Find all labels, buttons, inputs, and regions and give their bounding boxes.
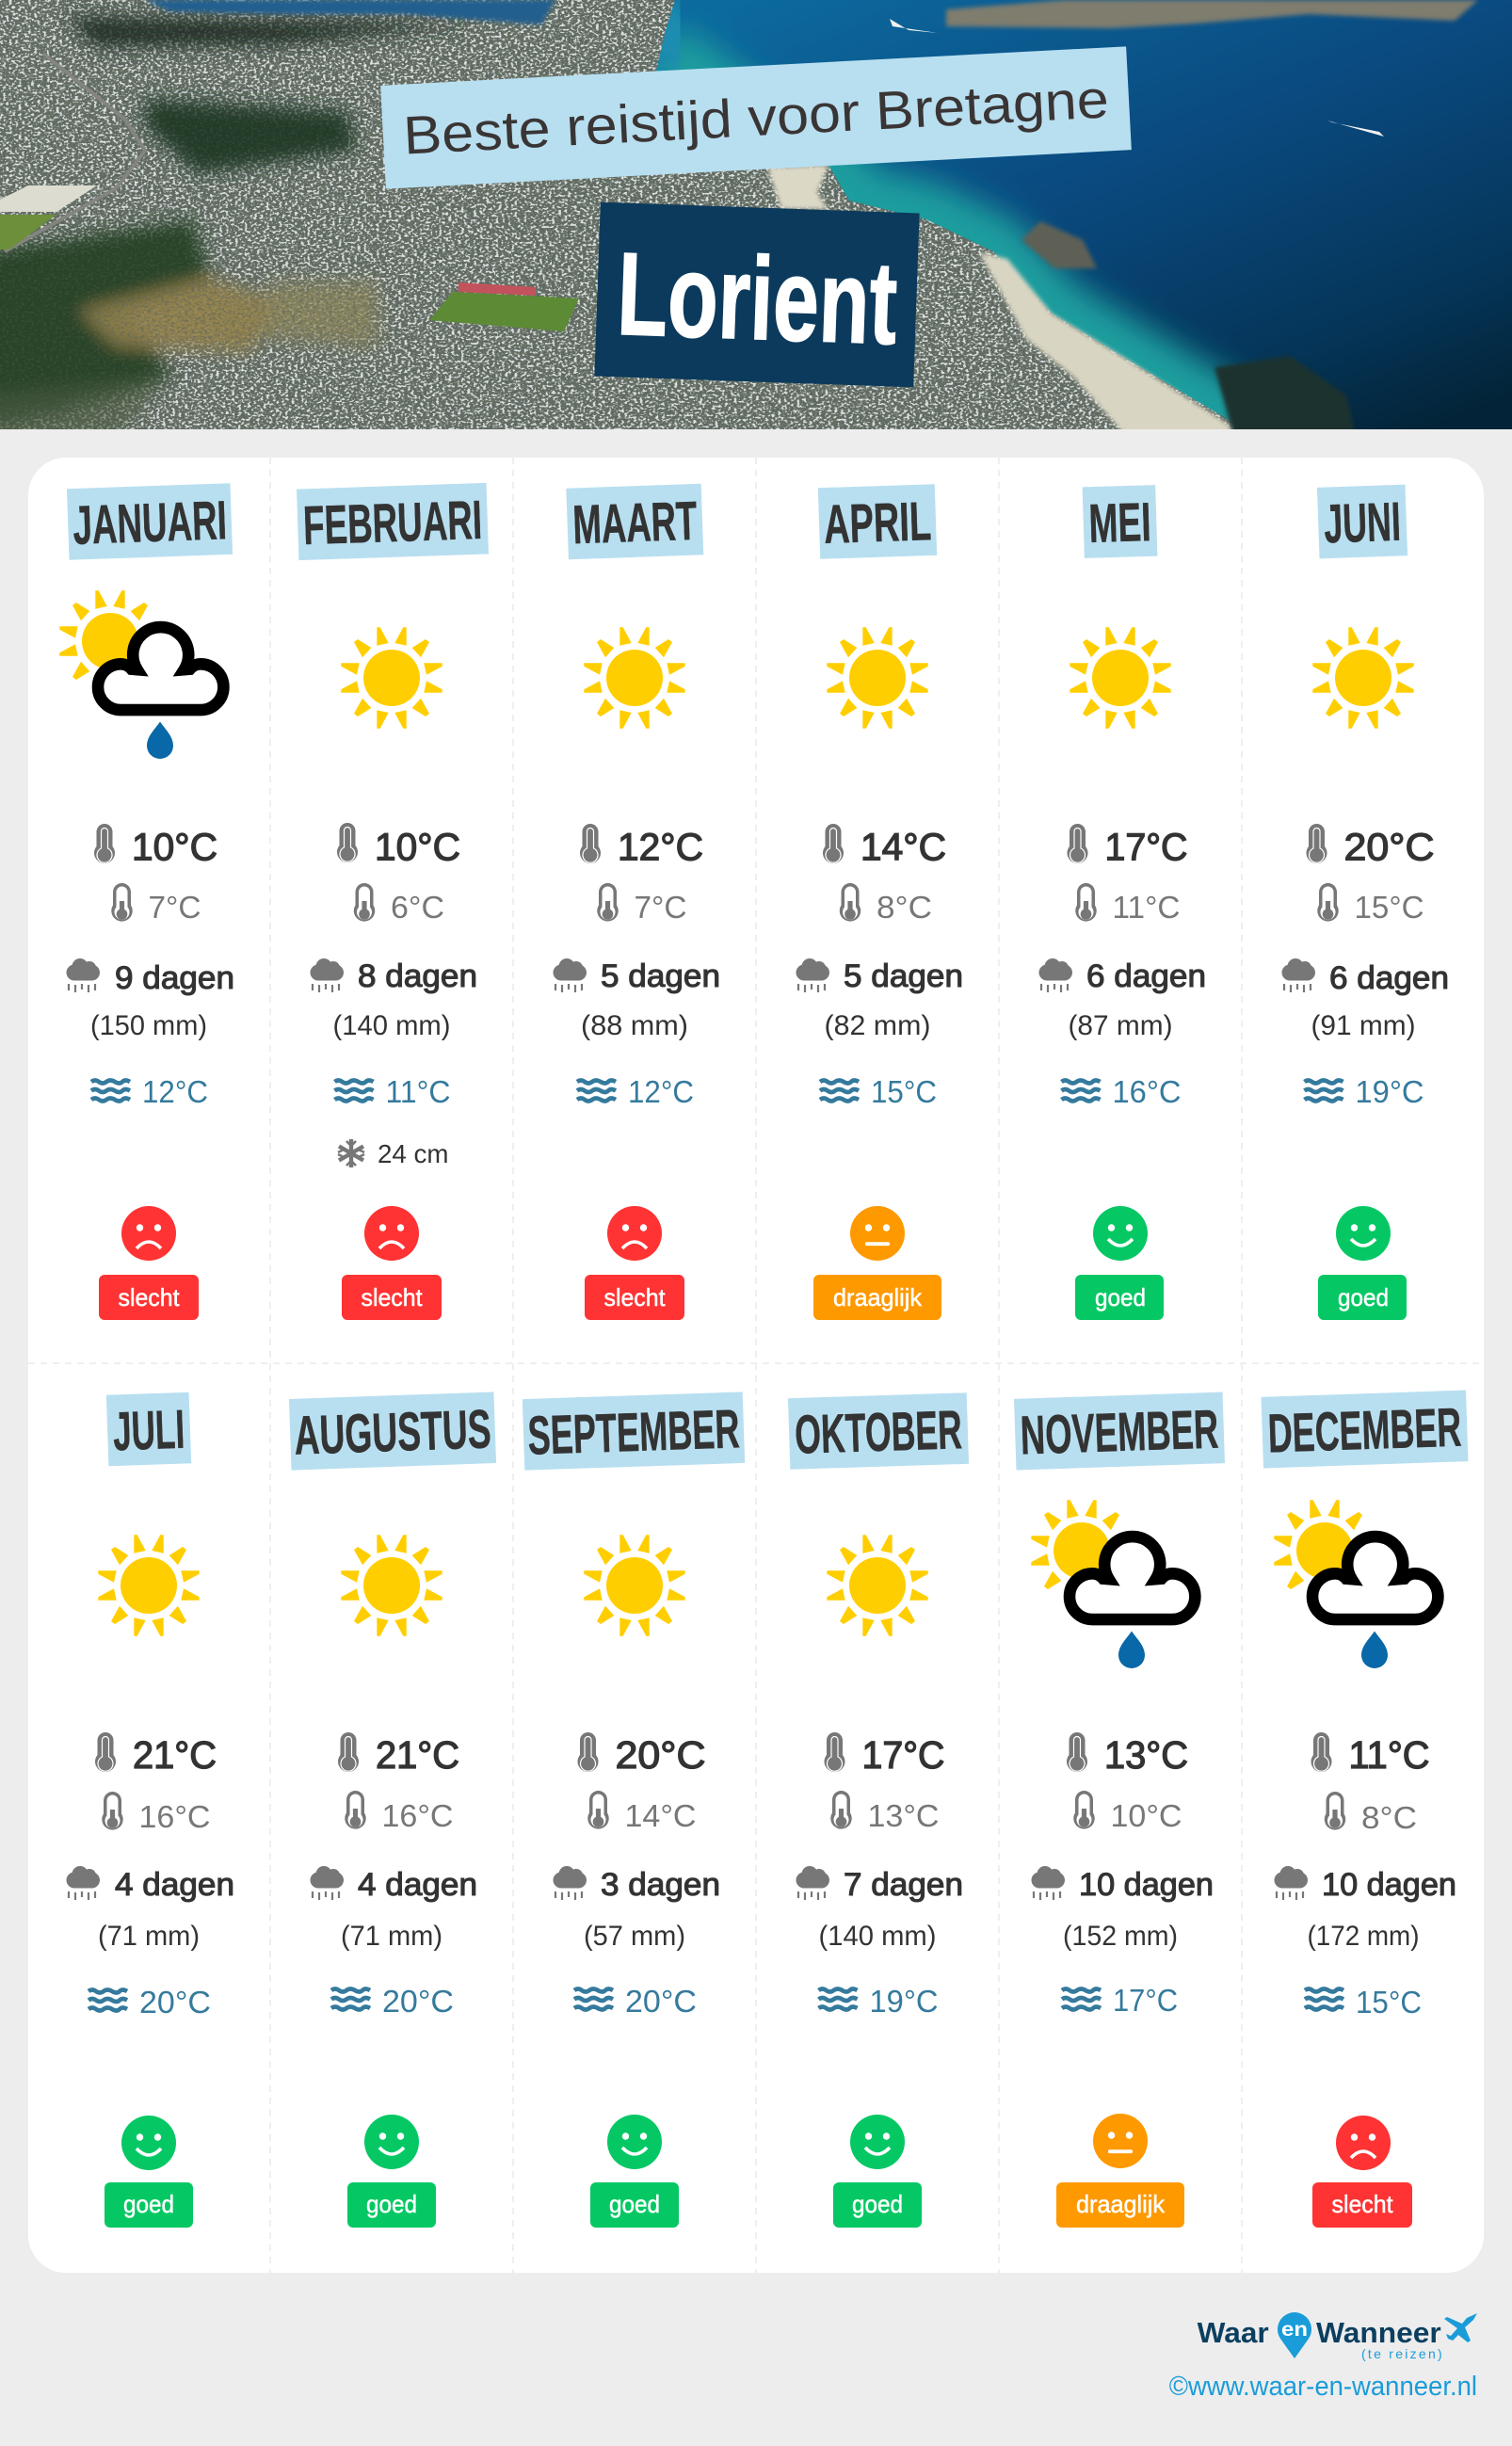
month: februari: (140 mm) bbox=[333, 1010, 450, 1041]
beaches bbox=[767, 165, 828, 209]
month: april bbox=[796, 484, 963, 1320]
month: juli: 20°C bbox=[139, 1985, 211, 2020]
month: september: (57 mm) bbox=[584, 1921, 685, 1952]
month: maart: 12°C bbox=[628, 1074, 694, 1109]
title banner: Beste reistijd voor Bretagne bbox=[380, 46, 1132, 189]
month: juni: JUNI bbox=[1323, 491, 1402, 555]
month: december bbox=[1261, 1391, 1469, 2228]
month: mei: 17°C bbox=[1105, 825, 1188, 868]
month: januari: 10°C bbox=[132, 825, 217, 868]
month: september: 20°C bbox=[625, 1984, 697, 2019]
month: augustus: (71 mm) bbox=[341, 1921, 442, 1952]
month: maart: 5 dagen bbox=[601, 958, 720, 994]
month: september: 3 dagen bbox=[601, 1867, 720, 1903]
month: juni: goed bbox=[1338, 1283, 1389, 1312]
top water bbox=[145, 0, 555, 24]
logo: Waar en Wanneer: (te reizen) bbox=[1361, 2346, 1442, 2361]
month: augustus: 16°C bbox=[382, 1798, 454, 1833]
month: juli: 21°C bbox=[133, 1733, 217, 1777]
month: december: 10 dagen bbox=[1322, 1867, 1456, 1903]
month: september: 14°C bbox=[625, 1798, 697, 1833]
month: december: 15°C bbox=[1356, 1985, 1422, 2020]
month: juni: 19°C bbox=[1356, 1074, 1424, 1109]
month: april: 14°C bbox=[861, 825, 946, 868]
month: februari: 8 dagen bbox=[358, 958, 477, 994]
month: maart bbox=[554, 484, 720, 1320]
month: april: 5 dagen bbox=[844, 958, 963, 994]
month: januari bbox=[59, 483, 234, 1320]
month: november: NOVEMBER bbox=[1020, 1399, 1219, 1466]
hero aerial photo of the coast bbox=[0, 0, 1512, 443]
month: februari: FEBRUARI bbox=[302, 490, 483, 556]
month: januari: JANUARI bbox=[72, 490, 228, 556]
month: juni: 6 dagen bbox=[1329, 960, 1449, 996]
month: maart: 12°C bbox=[618, 825, 703, 868]
month: augustus: goed bbox=[366, 2190, 417, 2218]
month: april: draaglijk bbox=[833, 1283, 923, 1312]
month: januari: 12°C bbox=[142, 1074, 208, 1109]
month: mei: (87 mm) bbox=[1068, 1010, 1173, 1041]
month: juni: 15°C bbox=[1354, 890, 1424, 925]
logo: Waar en Wanneer: en bbox=[1281, 2319, 1308, 2341]
month: februari bbox=[297, 483, 489, 1320]
title banner: Lorient: Lorient bbox=[616, 229, 899, 369]
month: juli: 4 dagen bbox=[115, 1867, 234, 1903]
title banner: Lorient bbox=[594, 202, 920, 387]
logo: Waar en Wanneer: Wanneer bbox=[1316, 2316, 1441, 2349]
month: januari: 9 dagen bbox=[115, 960, 234, 996]
month: februari: 6°C bbox=[391, 890, 444, 925]
month: december: 11°C bbox=[1348, 1733, 1429, 1777]
month: augustus: AUGUSTUS bbox=[293, 1398, 492, 1467]
panel: climate table bbox=[28, 458, 1484, 2273]
month: maart: 7°C bbox=[635, 890, 687, 925]
month: november: 17°C bbox=[1113, 1983, 1178, 2018]
month: augustus: 4 dagen bbox=[358, 1867, 477, 1903]
month: september: goed bbox=[609, 2190, 660, 2218]
title banner: Beste reistijd voor Bretagne: Beste reistijd voor Bretagne bbox=[402, 69, 1110, 167]
month: februari: slecht bbox=[362, 1283, 423, 1312]
month: november: draaglijk bbox=[1076, 2190, 1166, 2218]
month: november: 10°C bbox=[1111, 1798, 1182, 1833]
month: mei: 16°C bbox=[1113, 1074, 1181, 1109]
month: juni: (91 mm) bbox=[1311, 1010, 1416, 1041]
month: november: (152 mm) bbox=[1063, 1921, 1178, 1952]
month: november: 13°C bbox=[1104, 1733, 1188, 1777]
month: oktober: 17°C bbox=[862, 1733, 945, 1777]
snowfall bbox=[338, 1139, 448, 1168]
month: juli bbox=[66, 1392, 234, 2228]
month: september: SEPTEMBER bbox=[527, 1398, 741, 1467]
rocks and island bbox=[1214, 356, 1356, 435]
month: mei: 11°C bbox=[1113, 890, 1181, 925]
month: april: 15°C bbox=[871, 1074, 937, 1109]
month: oktober: 19°C bbox=[870, 1984, 938, 2019]
month: november bbox=[1014, 1392, 1225, 2228]
logo: Waar en Wanneer: Waar bbox=[1198, 2316, 1269, 2349]
month: augustus bbox=[289, 1392, 496, 2228]
month: mei bbox=[1039, 485, 1206, 1320]
month: oktober: OKTOBER bbox=[794, 1399, 963, 1466]
month: oktober: 13°C bbox=[868, 1798, 940, 1833]
month: juli: (71 mm) bbox=[98, 1921, 200, 1952]
month: december: (172 mm) bbox=[1307, 1921, 1420, 1952]
month: januari: slecht bbox=[119, 1283, 180, 1312]
month: april: APRIL bbox=[823, 491, 932, 555]
snowfall: 24 cm bbox=[378, 1139, 448, 1168]
month: juli: JULI bbox=[112, 1399, 185, 1462]
month: maart: (88 mm) bbox=[581, 1010, 688, 1041]
month: augustus: 21°C bbox=[376, 1733, 459, 1777]
month: augustus: 20°C bbox=[382, 1984, 454, 2019]
month: oktober: 7 dagen bbox=[844, 1867, 963, 1903]
month: december: slecht bbox=[1331, 2190, 1393, 2218]
logo: Waar en Wanneer bbox=[1198, 2312, 1477, 2361]
month: september bbox=[523, 1392, 745, 2228]
month: juni bbox=[1282, 485, 1449, 1320]
sports field bbox=[429, 292, 579, 331]
road bbox=[5, 54, 145, 251]
month: juli: 16°C bbox=[139, 1799, 211, 1834]
month: oktober: (140 mm) bbox=[819, 1921, 936, 1952]
month: januari: 7°C bbox=[149, 890, 201, 925]
month: mei: 6 dagen bbox=[1086, 958, 1206, 994]
sea bbox=[656, 0, 1512, 429]
month: februari: 10°C bbox=[375, 825, 460, 868]
month: juli: goed bbox=[123, 2190, 174, 2218]
month: mei: MEI bbox=[1088, 491, 1151, 555]
month: mei: goed bbox=[1095, 1283, 1146, 1312]
month: april: (82 mm) bbox=[825, 1010, 930, 1041]
website url: ©www.waar-en-wanneer.nl bbox=[1169, 2372, 1477, 2402]
month: januari: (150 mm) bbox=[90, 1010, 207, 1041]
month: september: 20°C bbox=[616, 1733, 706, 1777]
month: maart: MAART bbox=[571, 491, 698, 555]
month: maart: slecht bbox=[604, 1283, 666, 1312]
month: juni: 20°C bbox=[1344, 825, 1435, 868]
month: oktober bbox=[788, 1392, 969, 2228]
month: december: 8°C bbox=[1361, 1800, 1417, 1835]
month: november: 10 dagen bbox=[1079, 1867, 1214, 1903]
month: februari: 11°C bbox=[386, 1074, 450, 1109]
month: april: 8°C bbox=[877, 890, 932, 925]
month: oktober: goed bbox=[852, 2190, 903, 2218]
